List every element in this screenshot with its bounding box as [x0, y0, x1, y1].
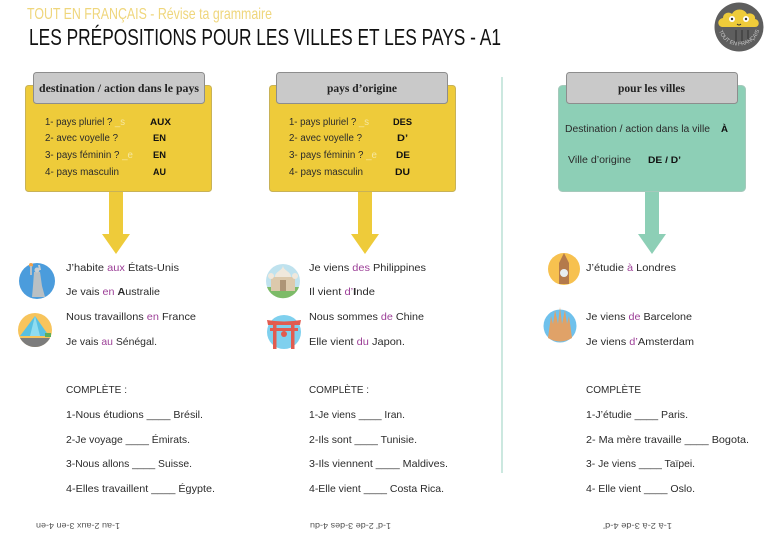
exercise: column 3: 1-J’étudie ____ Paris. [586, 409, 688, 421]
subtitle: TOUT EN FRANÇAIS - Révise ta grammaire [27, 6, 272, 23]
text: destination examples: J’habite aux États-Unis [66, 261, 179, 274]
icon: torii gate [267, 315, 301, 349]
panel: pays d'origine: 2- avec voyelle ? [289, 133, 362, 144]
logo [714, 2, 764, 52]
panel: destination: 3- pays féminin ? _e [45, 150, 133, 161]
exercise: column 2: 3-Ils viennent ____ Maldives. [309, 458, 448, 470]
text: city examples [586, 262, 694, 348]
exercise: column 2 [309, 383, 448, 495]
text: origin examples: Elle vient du Japon. [309, 336, 405, 348]
panel: pays d'origine [270, 72, 456, 254]
answers: column 1 upside down: 1-au 2-aux 3-en 4-en [36, 521, 120, 530]
icon: sagrada familia [544, 307, 576, 342]
panel: pour les villes: À [721, 124, 728, 135]
exercise: column 1: 2-Je voyage ____ Émirats. [66, 433, 190, 446]
panel: pays d'origine: DE [396, 150, 410, 161]
exercise: column 1 [66, 383, 215, 495]
panel: pays d'origine: 3- pays féminin ? _e [289, 150, 377, 161]
exercise: column 1: 1-Nous étudions ____ Brésil. [66, 409, 203, 421]
panel: pays d'origine: DU [395, 167, 410, 178]
exercise: column 2: 2-Ils sont ____ Tunisie. [309, 434, 417, 446]
panel: pays d'origine: D’ [397, 133, 408, 144]
panel: destination: AU [153, 167, 166, 178]
exercise: column 2: 1-Je viens ____ Iran. [309, 409, 405, 421]
title: LES PRÉPOSITIONS POUR LES VILLES ET LES PAYS - A1 [29, 24, 501, 50]
text: destination examples [66, 261, 196, 348]
panel: destination: EN [153, 150, 166, 161]
text: destination examples: Je vais au Sénégal. [66, 336, 157, 348]
panel: pour les villes: pour les villes [618, 83, 686, 95]
exercise: column 3: COMPLÈTE [586, 383, 641, 396]
logo: TOUT EN FRANÇAIS [720, 30, 759, 46]
icon: louvre pyramid [18, 313, 52, 347]
panel: destination: 1- pays pluriel ? _s [45, 117, 125, 128]
arrow: pour les villes [638, 190, 666, 254]
exercise: column 1: 3-Nous allons ____ Suisse. [66, 458, 192, 470]
text: origin examples: Je viens des Philippines [309, 262, 426, 274]
divider [501, 77, 503, 473]
answers: column 3 upside down: 1-à 2-à 3-de 4-d’ [603, 521, 672, 530]
arrow: destination [102, 190, 130, 254]
panel: destination: AUX [150, 117, 172, 128]
text: city examples: Je viens d’Amsterdam [586, 336, 694, 348]
text: destination examples: Je vais en Australie [66, 286, 160, 298]
answers: column 2 upside down: 1-d’ 2-de 3-des 4-du [310, 521, 391, 530]
exercise: column 3: 3- Je viens ____ Taïpei. [586, 458, 695, 470]
exercise: column 3 [586, 383, 749, 495]
text: origin examples [309, 262, 426, 348]
icon: statue of liberty [19, 263, 55, 299]
exercise: column 3: 4- Elle vient ____ Oslo. [586, 483, 695, 495]
panel: destination: destination / action dans le pays [39, 83, 200, 95]
panel: destination: EN [153, 133, 166, 144]
panel: pays d'origine: DES [393, 117, 412, 128]
exercise: column 1: COMPLÈTE : [66, 383, 127, 396]
exercise: column 2: 4-Elle vient ____ Costa Rica. [309, 483, 444, 495]
panel: pour les villes: DE / D’ [648, 155, 681, 166]
icon: big ben [548, 253, 580, 285]
panel: pays d'origine: pays d’origine [327, 83, 397, 95]
exercise: column 1: 4-Elles travaillent ____ Égypte. [66, 482, 215, 495]
panel: pour les villes: Ville d’origine [568, 155, 631, 166]
text: city examples: Je viens de Barcelone [586, 311, 692, 323]
exercise: column 3: 2- Ma mère travaille ____ Bogota. [586, 434, 749, 446]
panel: destination: 2- avec voyelle ? [45, 133, 118, 144]
text: city examples: J’étudie à Londres [586, 262, 676, 274]
panel: destination [26, 72, 212, 254]
panel: pays d'origine: 4- pays masculin [289, 167, 363, 178]
text: origin examples: Nous sommes de Chine [309, 311, 424, 323]
panel: pour les villes: Destination / action dans la ville [565, 124, 710, 135]
icon: taj mahal [266, 264, 300, 298]
text: origin examples: Il vient d’Inde [309, 286, 375, 298]
panel: destination: 4- pays masculin [45, 167, 119, 178]
exercise: column 2: COMPLÈTE : [309, 383, 369, 396]
text: destination examples: Nous travaillons en France [66, 311, 196, 323]
arrow: pays d'origine [351, 190, 379, 254]
panel: pour les villes [558, 72, 746, 254]
panel: pays d'origine: 1- pays pluriel ? _s [289, 117, 369, 128]
